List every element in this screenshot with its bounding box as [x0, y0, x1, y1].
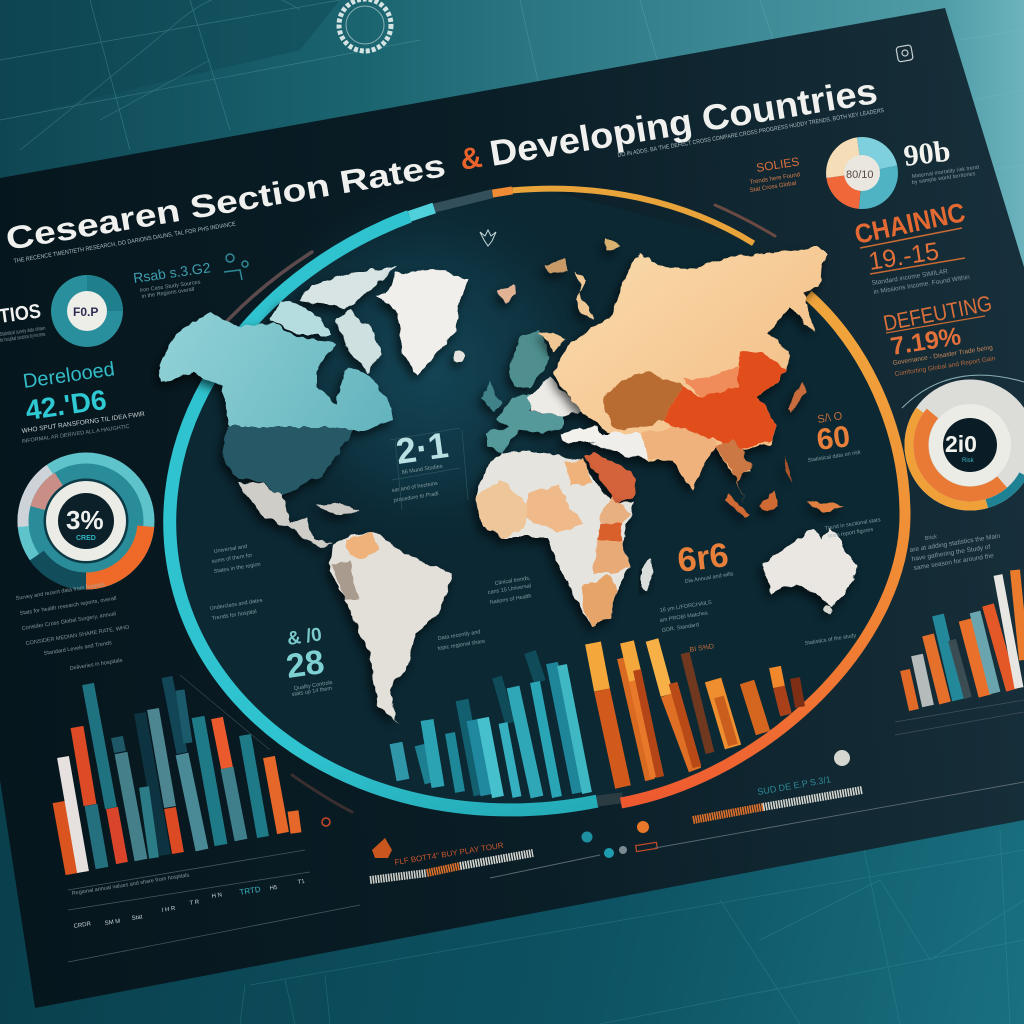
text block: left lower: CONSIDER MEDIAN SHARE RATE, WHO	[25, 625, 130, 647]
text blocks around map: Data recently and	[437, 629, 481, 642]
map: europe	[481, 330, 583, 453]
stat: 60: S/\ O	[817, 410, 844, 426]
label: solies: Trends here Found	[749, 172, 800, 186]
text block: right lower: are at adding statistics the Main	[909, 533, 1001, 554]
stat: 6r6: 16 ym L/FORCHAILS	[659, 600, 713, 614]
text blocks around map: Trends for hospital	[211, 609, 257, 622]
text blocks around map: States in the region	[213, 562, 261, 575]
text block: left lower: Survey and recent data from hospital	[15, 582, 105, 602]
label: solies	[749, 154, 800, 194]
label: results block	[132, 259, 212, 300]
text block: left lower: Standard Levels and Trends	[43, 640, 113, 657]
label: results block: Rsab s.3.G2	[132, 259, 212, 286]
panel: chaining stats: CHAINNC	[852, 197, 968, 250]
donut: top right pie	[826, 137, 898, 209]
stat: 2:1: 86 Mund Studies	[401, 464, 443, 476]
stat: 28: 28	[284, 643, 327, 686]
map: africa	[475, 450, 635, 625]
title: Cesearen Section Rates	[3, 147, 448, 257]
text block: right lower: Brick	[924, 534, 938, 542]
panel: defeuting stats: Comforting Global and Report Gain	[894, 355, 996, 378]
text blocks around map: Underclass and dates	[209, 598, 263, 612]
map: asia	[498, 237, 845, 518]
table: left chart legend: T1	[297, 879, 306, 886]
donut: left large: CRED	[76, 535, 96, 542]
stat: 60: Trend in sectional stats	[824, 517, 881, 532]
stat: TIOS	[0, 300, 46, 344]
stat: 6r6: Dia Annual and wills	[684, 571, 734, 585]
text block: right lower: same season for around the	[913, 552, 995, 572]
panel: chaining stats: in Missions Income. Found Within	[873, 274, 971, 296]
donut: top right pie: 80/10	[846, 169, 874, 181]
text blocks around map: cans 15 Universal	[487, 583, 531, 596]
icons: bottom markers	[372, 782, 1024, 878]
table: left chart legend: TRTD	[239, 885, 261, 897]
donut: left large: 3%	[66, 505, 104, 535]
stat: 2:1: procedure to Pradi	[393, 491, 439, 504]
map: south america	[330, 532, 452, 727]
text block: left lower: Deliveries in hospitals	[69, 658, 123, 672]
panel: chaining stats	[852, 197, 971, 296]
title: &	[458, 141, 485, 177]
donut: right: Risk	[962, 458, 975, 464]
stat: 60: Statistical data on risk	[807, 450, 861, 464]
stat: 60	[807, 410, 881, 540]
panel: defeuting stats	[881, 290, 996, 378]
panel: chaining stats: 19.-15	[867, 237, 941, 276]
stat: 28: & /0	[286, 624, 323, 650]
table: left chart legend: H N	[211, 892, 223, 900]
stat: 28: stats up 14 them	[291, 686, 333, 698]
table: left chart legend: I H R	[161, 906, 176, 914]
map: north america	[158, 267, 398, 547]
text block: right lower	[909, 533, 1001, 572]
stat: TIOS: for hospital sections by income	[0, 332, 46, 344]
donut: right: 2i0	[945, 431, 977, 457]
stat: 6r6: am PROBI Matches	[659, 610, 709, 624]
donut: right	[887, 362, 1024, 528]
label: results block: Iron Case Study Sources	[139, 279, 201, 294]
icon: corner glyph	[896, 45, 913, 62]
stat: 2:1	[390, 424, 468, 510]
map disc background	[112, 130, 924, 877]
text block: left lower: Consider Cross Global Surgery, annual	[21, 611, 116, 632]
label: solies: SOLIES	[755, 154, 800, 175]
progress bar: centre bottom	[370, 841, 533, 880]
text blocks around map: Nations of Health	[489, 593, 532, 606]
progress bar: right bottom	[693, 774, 862, 820]
table: left chart legend: T R	[189, 899, 200, 907]
stat: 90b: by sample world territories	[911, 171, 976, 186]
progress bar: right bottom: SUD DE E.P S.3/1	[757, 774, 832, 797]
table: left chart legend: Regional annual values and share from hospitals	[71, 872, 190, 897]
text blocks around map	[209, 544, 532, 652]
icon: moon marker	[834, 750, 850, 766]
progress bar: centre bottom: FLF BOTT4" BUY PLAY TOUR	[394, 841, 504, 867]
title	[3, 70, 880, 257]
title subtitles: DO IN ADDS. BA 'THE DEFECT CROSS COMPARE CROSS PROGRESS HUDDY TRENDS, BOTH KEY LEADERS	[617, 108, 885, 159]
text blocks around map: Clinical trends,	[494, 575, 531, 587]
label: orange chart caption: BI S%D	[689, 643, 715, 654]
title subtitles	[13, 108, 885, 265]
donut: left small	[51, 275, 123, 347]
stat: 28: Quality Controls	[293, 680, 333, 692]
map: madagascar	[640, 557, 653, 592]
ring: circular frame	[111, 143, 905, 879]
panel: developed stats	[21, 358, 145, 445]
panel: developed stats: WHO SPUT RANSFORNG TIL IDEA FWIR	[21, 411, 145, 435]
title: Developing Countries	[487, 70, 880, 174]
bar chart: centre teal	[396, 652, 587, 797]
donut: left small: F0.P	[73, 305, 98, 319]
bar chart: left	[59, 675, 330, 874]
stat: 6r6: GDR. Standard	[661, 622, 699, 634]
title subtitles: THE RECENCE TWENTIETH RESEARCH, DO DARIONS DAUNS, TAL FOR PHS INDIANCE	[13, 222, 236, 265]
stat: 28	[284, 624, 333, 698]
panel: defeuting stats: DEFEUTING	[881, 290, 994, 336]
stat: 2:1: 2·1	[393, 424, 451, 472]
table: left chart legend: H5	[269, 885, 279, 892]
stat: 90b: Maternal mortality risk trend	[911, 165, 979, 180]
donut: left large	[19, 454, 153, 588]
stat: 90b: 90b	[902, 135, 952, 173]
stat: 90b	[902, 135, 979, 186]
text blocks around map: topic regional share	[437, 639, 486, 652]
label: results block: in the Regions overall	[141, 287, 195, 300]
stat: 2:1: sar and of hecteins	[391, 481, 438, 494]
stat: TIOS: Statistical survey data shown	[0, 326, 46, 338]
table: left chart legend: SM M	[104, 919, 121, 927]
table: left chart legend: Stat	[131, 914, 143, 922]
text block: left lower: Stats for health research reports, overall	[19, 596, 117, 617]
stat: 6r6: 6r6	[675, 536, 731, 580]
icon: spiral seal on background sheet	[339, 0, 391, 51]
stat: 6r6	[659, 536, 734, 634]
panel: developed stats: Derelooed	[22, 358, 116, 393]
label: orange chart caption	[689, 633, 857, 654]
icon: small glyphs near results	[224, 254, 248, 280]
bar chart: right	[895, 570, 1024, 735]
panel: defeuting stats: Governance - Disaster Trade being	[892, 344, 994, 367]
panel: developed stats: 42.'D6	[24, 384, 108, 426]
label: solies: Stat Cross Global	[749, 181, 797, 194]
panel: defeuting stats: 7.19%	[889, 322, 963, 361]
label: orange chart caption: Statistics of the study	[804, 633, 857, 647]
stat: 60: Main report figures	[827, 527, 874, 540]
text blocks around map: sums of them for	[211, 553, 253, 565]
map: australia	[763, 527, 857, 614]
table: left chart legend	[68, 850, 360, 962]
text block: right lower: have gathering the Study of	[911, 544, 991, 563]
panel: chaining stats: Standard income SIMILAR	[871, 268, 949, 287]
stat: 60: 60	[815, 420, 852, 457]
panel: developed stats: INFORMAL AR DERIVED ALL A HAUGHTIC	[21, 424, 130, 445]
arc accents beyond ring	[228, 205, 775, 812]
text blocks around map: Universal and	[213, 544, 248, 555]
bar chart: centre orange	[593, 640, 800, 787]
icon: leaf badge in map	[480, 230, 496, 246]
text block: left lower	[15, 582, 130, 672]
table: left chart legend: CRDR	[73, 921, 92, 930]
map: greenland	[377, 268, 468, 375]
